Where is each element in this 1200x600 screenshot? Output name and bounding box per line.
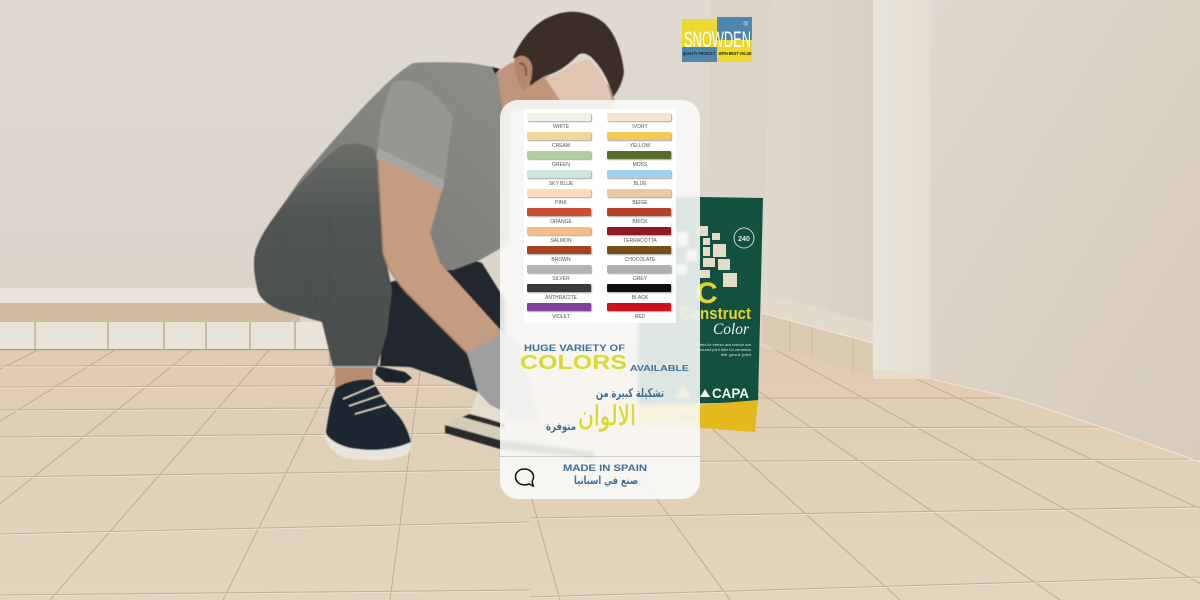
seal badge [734, 228, 754, 248]
swatch labels: BEIGE [632, 200, 648, 206]
far shoe [375, 366, 412, 383]
registered mark: ® [744, 21, 748, 28]
bag subname: Color [713, 321, 750, 338]
bag weight: 5 kg [680, 413, 695, 422]
translucent info panel [500, 100, 700, 499]
swatch labels: RED [635, 314, 646, 320]
grout trowel [445, 392, 595, 458]
swatch labels: ORANGE [550, 219, 572, 225]
bag brand: CAPA [712, 385, 749, 401]
swatch labels: GREEN [552, 162, 570, 168]
bag logo C: C [696, 277, 718, 310]
arabic heading colours: الالوان [578, 401, 636, 432]
divider [500, 456, 700, 457]
icon: speech bubble [515, 469, 534, 486]
logo tagline right: WITH BEST VALUE [718, 51, 752, 56]
dark far leg [380, 260, 505, 400]
ear [514, 56, 532, 90]
hair [513, 12, 624, 97]
swatch labels: SILVER [552, 276, 570, 282]
swatch labels: CHOCOLATE [625, 257, 656, 263]
swatch labels: BLACK [632, 295, 649, 301]
english heading available: AVAILABLE [630, 364, 690, 373]
english heading line 1: HUGE VARIETY OF [524, 343, 625, 354]
arabic heading available: متوفرة [546, 420, 576, 433]
swatch labels: GREY [633, 276, 648, 282]
bag small print: Suited for interior and exterior use [696, 343, 751, 347]
made in spain: MADE IN SPAIN [563, 463, 647, 474]
product bag [638, 196, 763, 432]
arabic heading line 1: تشكيلة كبيرة من [596, 386, 664, 400]
swatch labels: WHITE [553, 124, 570, 130]
ankle [335, 368, 373, 394]
bag small print: coloured joint filler for ceramics [696, 348, 751, 352]
swatch labels [545, 124, 657, 320]
seal badge: 240 [738, 236, 750, 243]
logo wordmark: SNOWDEN [684, 27, 751, 52]
brand logo [682, 17, 752, 62]
swatch labels: PINK [555, 200, 567, 206]
swatch labels: ANTHRACITE [545, 295, 578, 301]
left skirting and wall tile row [0, 288, 330, 350]
swatch labels: CREAM [552, 143, 570, 149]
bag small print: tile grout joint [721, 353, 751, 357]
bag small print [696, 343, 751, 357]
bag triangles [700, 389, 710, 397]
arm [377, 155, 505, 356]
bag yellow base [638, 400, 758, 432]
near leg [254, 144, 392, 367]
floor tiles [0, 345, 1200, 600]
swatch labels: MOSS [633, 162, 648, 168]
swatch labels: IVORY [632, 124, 648, 130]
swatch labels: SKY BLUE [549, 181, 574, 187]
made in spain arabic: صنع في اسبانيا [574, 474, 638, 487]
swatch labels: YELLOW [630, 143, 651, 149]
colour chart [524, 109, 676, 323]
swatch labels: BLUE [633, 181, 647, 187]
forehead highlight [545, 60, 612, 100]
collar [492, 67, 500, 74]
near shoe [324, 379, 411, 460]
decorative squares [676, 226, 737, 287]
glove [467, 332, 540, 420]
english heading colors: COLORS [520, 352, 627, 374]
sleeve [377, 81, 453, 190]
left wall [0, 0, 720, 352]
swatch labels: TERRACOTTA [623, 238, 657, 244]
swatch labels: SALMON [550, 238, 572, 244]
worker [254, 12, 624, 460]
bag name: Construct [680, 304, 751, 323]
swatch labels: BROWN [551, 257, 571, 263]
neck and face [497, 62, 616, 112]
right walls, skirting and pillar [710, 0, 1200, 462]
swatch rows [527, 113, 671, 311]
swatch labels: VIOLET [552, 314, 570, 320]
logo tagline left: QUALITY PRODUCT [682, 51, 716, 56]
grey t-shirt [277, 62, 510, 270]
trouser hem [333, 366, 377, 368]
swatch labels: BRICK [632, 219, 648, 225]
